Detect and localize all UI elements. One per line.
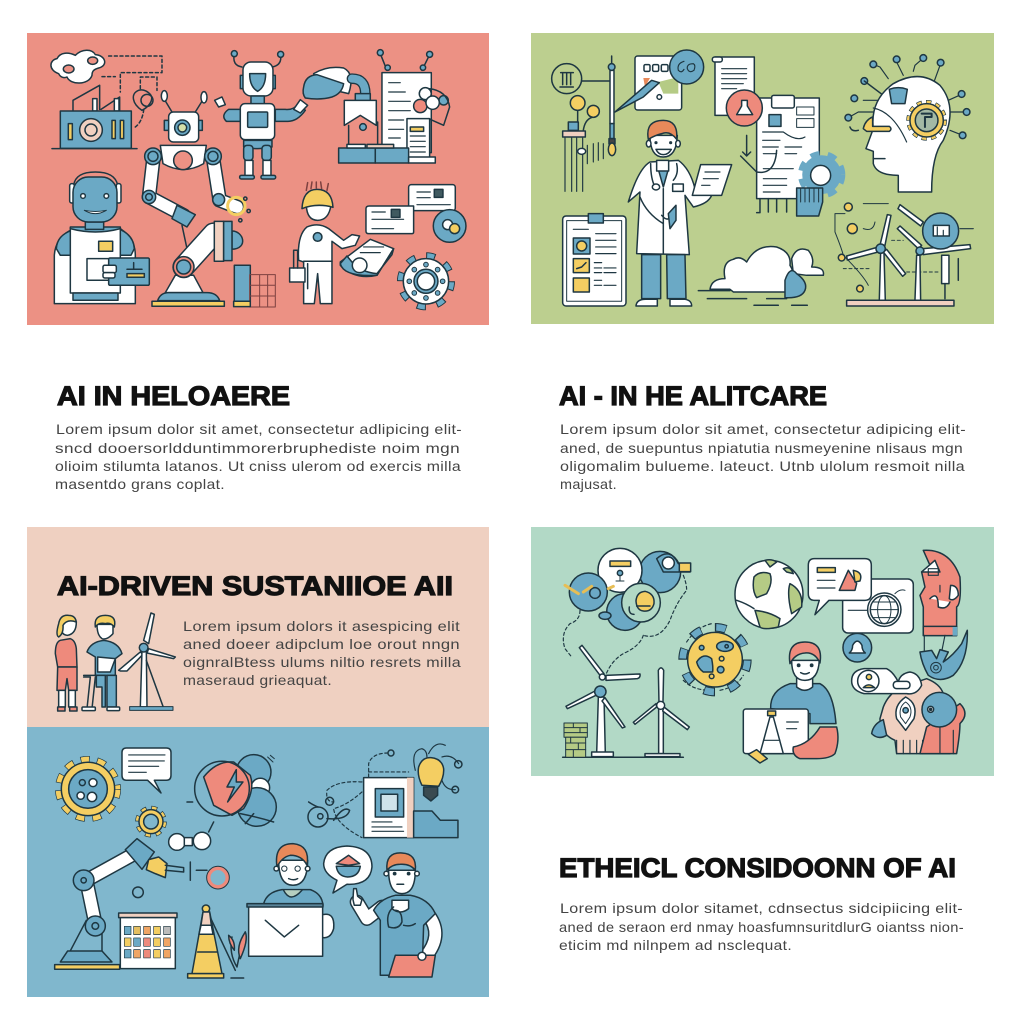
icon: small gear	[138, 808, 164, 835]
icon: person with laptop	[743, 642, 838, 763]
icon: wind turbines	[835, 203, 973, 306]
icon: energy bubbles	[169, 755, 276, 850]
icon: buildings	[234, 265, 275, 307]
text block: first lorem paragraph: masentdo grans coplat.	[55, 476, 225, 492]
panel: robots illustration	[27, 33, 489, 325]
icon: factory	[52, 85, 137, 149]
icon: gear	[401, 256, 451, 307]
text block: third lorem paragraph: oignralBtess ulums niltio resrets milla	[183, 654, 461, 670]
text block: first lorem paragraph: olioim stilumta latanos. Ut cniss ulerom od exercis milla	[55, 458, 461, 474]
text block: second lorem paragraph	[560, 421, 966, 492]
heading: AI in healthcare: AI - IN HE ALITCARE	[559, 381, 827, 411]
text block: second lorem paragraph: Lorem ipsum dolor sit amet, consectetur adipicing elit-	[560, 421, 966, 437]
text block: third lorem paragraph	[183, 618, 461, 688]
icon: chat bubbles	[808, 559, 913, 662]
icon: cloud	[698, 246, 823, 305]
icon: documents and flask	[712, 57, 819, 213]
icon: head with circuit brain	[845, 55, 970, 192]
icon: monitor with brush	[615, 50, 704, 112]
text block: first lorem paragraph: Lorem ipsum dolor sit amet, consectetur adlipicing elit-	[56, 421, 462, 437]
text block: fourth lorem paragraph	[559, 900, 964, 953]
icon: circuit document and bulb	[308, 744, 462, 838]
icon: calendar	[119, 913, 177, 969]
text block: third lorem paragraph: aned doeer adipclum loe orout nngn	[183, 636, 460, 652]
heading: ethical considerations of AI: ETHEICL CONSIDOONN OF AI	[559, 853, 956, 883]
dashed connection paths	[563, 575, 687, 677]
icon: wind turbines	[563, 645, 689, 757]
icon: clipboard	[563, 214, 626, 306]
text block: third lorem paragraph: maseraud grieaquat.	[183, 672, 332, 688]
icon: red bust and leaf	[920, 550, 967, 679]
icon: yellow gear with nodes	[683, 624, 747, 692]
heading: AI-driven sustainable: AI-DRIVEN SUSTANIIOE AII	[57, 571, 453, 601]
panel: sustainable AI header	[27, 527, 489, 727]
text block: second lorem paragraph: aned, de suepuntus npiatutia nusmeyenine nlisaus mgn	[560, 440, 963, 456]
icon: person with laptop	[247, 844, 334, 956]
icon: speech bubble with bowl	[324, 846, 372, 893]
icon: gear and hand	[797, 155, 842, 216]
icon: globe	[735, 560, 803, 629]
icon: machine with documents	[303, 50, 450, 163]
icon: standing robot	[215, 51, 308, 179]
text block: second lorem paragraph: majusat.	[560, 476, 617, 492]
icon: robot arm on base	[152, 221, 243, 306]
text block: first lorem paragraph	[55, 421, 462, 492]
heading: AI in heloaere: AI IN HELOAERE	[57, 381, 290, 411]
icon: speech bubble	[122, 748, 171, 793]
panel: healthcare illustration	[531, 33, 994, 324]
icon: traffic cone and plant	[188, 905, 246, 978]
icon: lab equipment	[552, 56, 616, 191]
icon: doctor	[628, 120, 732, 306]
panel: sustainable AI illustration	[27, 727, 489, 997]
panel: ethics illustration	[531, 527, 994, 776]
icon: central robot arms	[142, 91, 250, 249]
text block: second lorem paragraph: oligomalim bulueme. lateuct. Utnb ulolum resmoit nilla	[560, 458, 965, 474]
text block: fourth lorem paragraph: aned de seraon erd nmay hoasfumnsuritdlurG oiantss nion-	[559, 919, 964, 935]
icon: cloud network	[51, 50, 162, 127]
icon: cards and scroll	[340, 185, 466, 277]
icon: people with wind turbine	[55, 613, 175, 711]
text block: fourth lorem paragraph: Lorem ipsum dolor sitamet, cdnsectus sidcipiicing elit-	[560, 900, 963, 916]
icon: smiling robot worker	[54, 172, 149, 304]
icon: brick stack	[564, 723, 587, 757]
icon: worker in hard hat	[290, 182, 360, 304]
icon: robot arm	[55, 839, 229, 969]
icon: medic with clipboard	[353, 853, 435, 977]
icon: profile heads	[852, 669, 965, 754]
text block: first lorem paragraph: sncd dooersorldduntimmorerbruphediste noim mgn	[55, 440, 460, 456]
icon: large yellow gear	[59, 760, 117, 818]
icon: bubble cluster	[565, 548, 691, 630]
text block: fourth lorem paragraph: eticim md nilnpem ad nsclequat.	[559, 937, 792, 953]
text block: third lorem paragraph: Lorem ipsum dolors it asespicing elit	[183, 618, 460, 634]
